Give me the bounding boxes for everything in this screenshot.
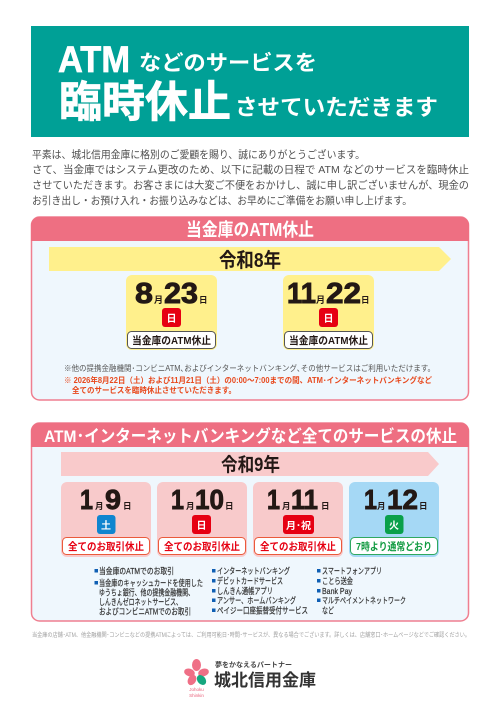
date card: August 23: 日 — [199, 295, 208, 305]
date card: January 9: 全てのお取引休止 — [68, 540, 144, 553]
service list: column 2 — [212, 566, 308, 616]
date card: August 23: 月 — [154, 295, 163, 305]
date card: January 9: 月 — [95, 501, 104, 511]
date card: November 22 — [283, 275, 374, 350]
date card: January 9: 1 — [80, 484, 93, 515]
date card: January 11: 11 — [291, 484, 318, 515]
arrow banner: Reiwa 9 — [61, 452, 439, 476]
note: full suspension: 全てのサービスを臨時休止させていただきます。 — [72, 385, 236, 395]
service list: column 3: など — [322, 606, 334, 616]
date card: November 22: 月 — [316, 295, 325, 305]
date card: August 23 — [126, 275, 217, 350]
panel: ATM suspension — [31, 217, 469, 400]
intro text: さて、当金庫ではシステム更改のため、以下に記載の日程で ATM などのサービスを臨時休止 — [32, 163, 469, 176]
logo — [183, 659, 316, 698]
date card: January 11: 月 — [282, 501, 291, 511]
intro text: お引き出し・お預け入れ・お振り込みなどは、お早めにご準備をお願い申し上げます。 — [32, 194, 412, 207]
date card: August 23: 当金庫のATM休止 — [132, 334, 211, 347]
date card: January 11 — [253, 482, 343, 557]
note: full suspension — [64, 375, 432, 395]
intro text — [32, 148, 469, 207]
date card: January 9: 日 — [123, 501, 132, 511]
arrow banner: Reiwa 8 — [49, 247, 451, 272]
date card: August 23: 日 — [166, 313, 176, 325]
service list: column 2: ペイジー口座振替受付サービス — [217, 606, 308, 616]
icon: blossom — [183, 659, 210, 687]
intro text: 平素は、城北信用金庫に格別のご愛顧を賜り、誠にありがとうございます。 — [32, 148, 365, 161]
service list: column 1: 当金庫のキャッシュカードを使用した — [99, 578, 203, 588]
date card: January 12: 12 — [387, 484, 418, 515]
date card: January 11: 日 — [321, 501, 330, 511]
date card: January 12: 日 — [419, 501, 428, 511]
service list: column 1: およびコンビニATMでのお取引 — [99, 606, 191, 616]
service list: column 2: デビットカードサービス — [217, 576, 283, 586]
note: full suspension: ※ 2026年8月22日（土）および11月21日（土）の0:00～7:00までの間、ATM･インターネットバンキングなど — [64, 375, 432, 385]
service list: column 1: しんきんゼロネットサービス、 — [99, 597, 182, 607]
arrow banner: Reiwa 8: 令和8年 — [219, 249, 281, 272]
date card: January 12 — [349, 482, 439, 557]
date card: January 10: 日 — [225, 501, 234, 511]
panel header: ATM suspension — [31, 217, 469, 241]
date card: November 22: 日 — [324, 313, 334, 325]
logo small name: Shinkin — [189, 693, 204, 698]
date card: January 10: 日 — [196, 520, 206, 532]
service list: column 1: ゆうちょ銀行、他の提携金融機関、 — [99, 588, 194, 598]
date card: August 23: 8 — [135, 278, 153, 310]
service list: column 2: アンサー、ホームバンキング — [217, 596, 296, 606]
date card: January 9 — [61, 482, 151, 557]
logo small name — [189, 687, 204, 698]
date card: January 9: 9 — [105, 484, 121, 515]
service list: column 3: マルチペイメントネットワーク — [322, 596, 406, 606]
service list: column 3: Bank Pay — [322, 586, 353, 596]
title banner: ATM — [58, 39, 130, 80]
date card: November 22: 日 — [361, 295, 370, 305]
arrow banner: Reiwa 9: 令和9年 — [221, 453, 280, 476]
date card: November 22: 11 — [287, 278, 316, 310]
service list: column 1: 当金庫のATMでのお取引 — [99, 566, 174, 576]
intro text: させていただきます。お客さまには大変ご不便をおかけし、誠に申し訳ございませんが、現金の — [32, 178, 469, 192]
panel: all services suspension — [31, 423, 469, 621]
date card: January 12: 火 — [389, 520, 399, 532]
date card: January 12: 7時より通常どおり — [356, 540, 432, 553]
logo tagline: 夢をかなえるパートナー — [215, 660, 292, 669]
date card: January 12: 1 — [364, 484, 377, 515]
date card: January 9: 土 — [101, 519, 111, 532]
panel header: ATM suspension: 当金庫のATM休止 — [186, 219, 314, 240]
note: other services: ※他の提携金融機関･コンビニATM､およびインターネットバンキング､その他サービスはご利用いただけます。 — [64, 363, 435, 373]
date card: January 10: 月 — [186, 501, 195, 511]
title banner — [31, 26, 469, 137]
service list: column 3 — [317, 566, 406, 616]
date card: November 22: 当金庫のATM休止 — [289, 334, 368, 347]
date card: January 11: 全てのお取引休止 — [260, 540, 336, 553]
title banner: などのサービスを — [139, 52, 317, 75]
service list: column 2: インターネットバンキング — [217, 566, 290, 576]
date card: August 23: 23 — [164, 278, 198, 310]
title banner: 臨時休止 — [59, 79, 231, 127]
logo name: 城北信用金庫 — [214, 670, 316, 690]
service list: column 3: スマートフォンアプリ — [322, 566, 382, 576]
date card: November 22: 22 — [326, 278, 361, 310]
date card: January 10: 10 — [195, 484, 224, 515]
logo small name: Johoku — [189, 687, 204, 692]
date card: January 11: 月･祝 — [286, 520, 312, 532]
date card: January 11: 1 — [267, 484, 280, 515]
service list: column 3: ことら送金 — [322, 576, 354, 586]
date card: January 10: 全てのお取引休止 — [164, 540, 240, 553]
date card: January 10 — [157, 482, 247, 557]
service list: column 2: しんきん通帳アプリ — [217, 586, 273, 596]
date card: January 12: 月 — [377, 501, 386, 511]
service list: column 1 — [94, 566, 203, 616]
title banner: させていただきます — [235, 95, 438, 120]
date card: January 10: 1 — [171, 484, 184, 515]
panel header: all services suspension: ATM･インターネットバンキングなど全てのサービスの休止 — [44, 426, 457, 446]
